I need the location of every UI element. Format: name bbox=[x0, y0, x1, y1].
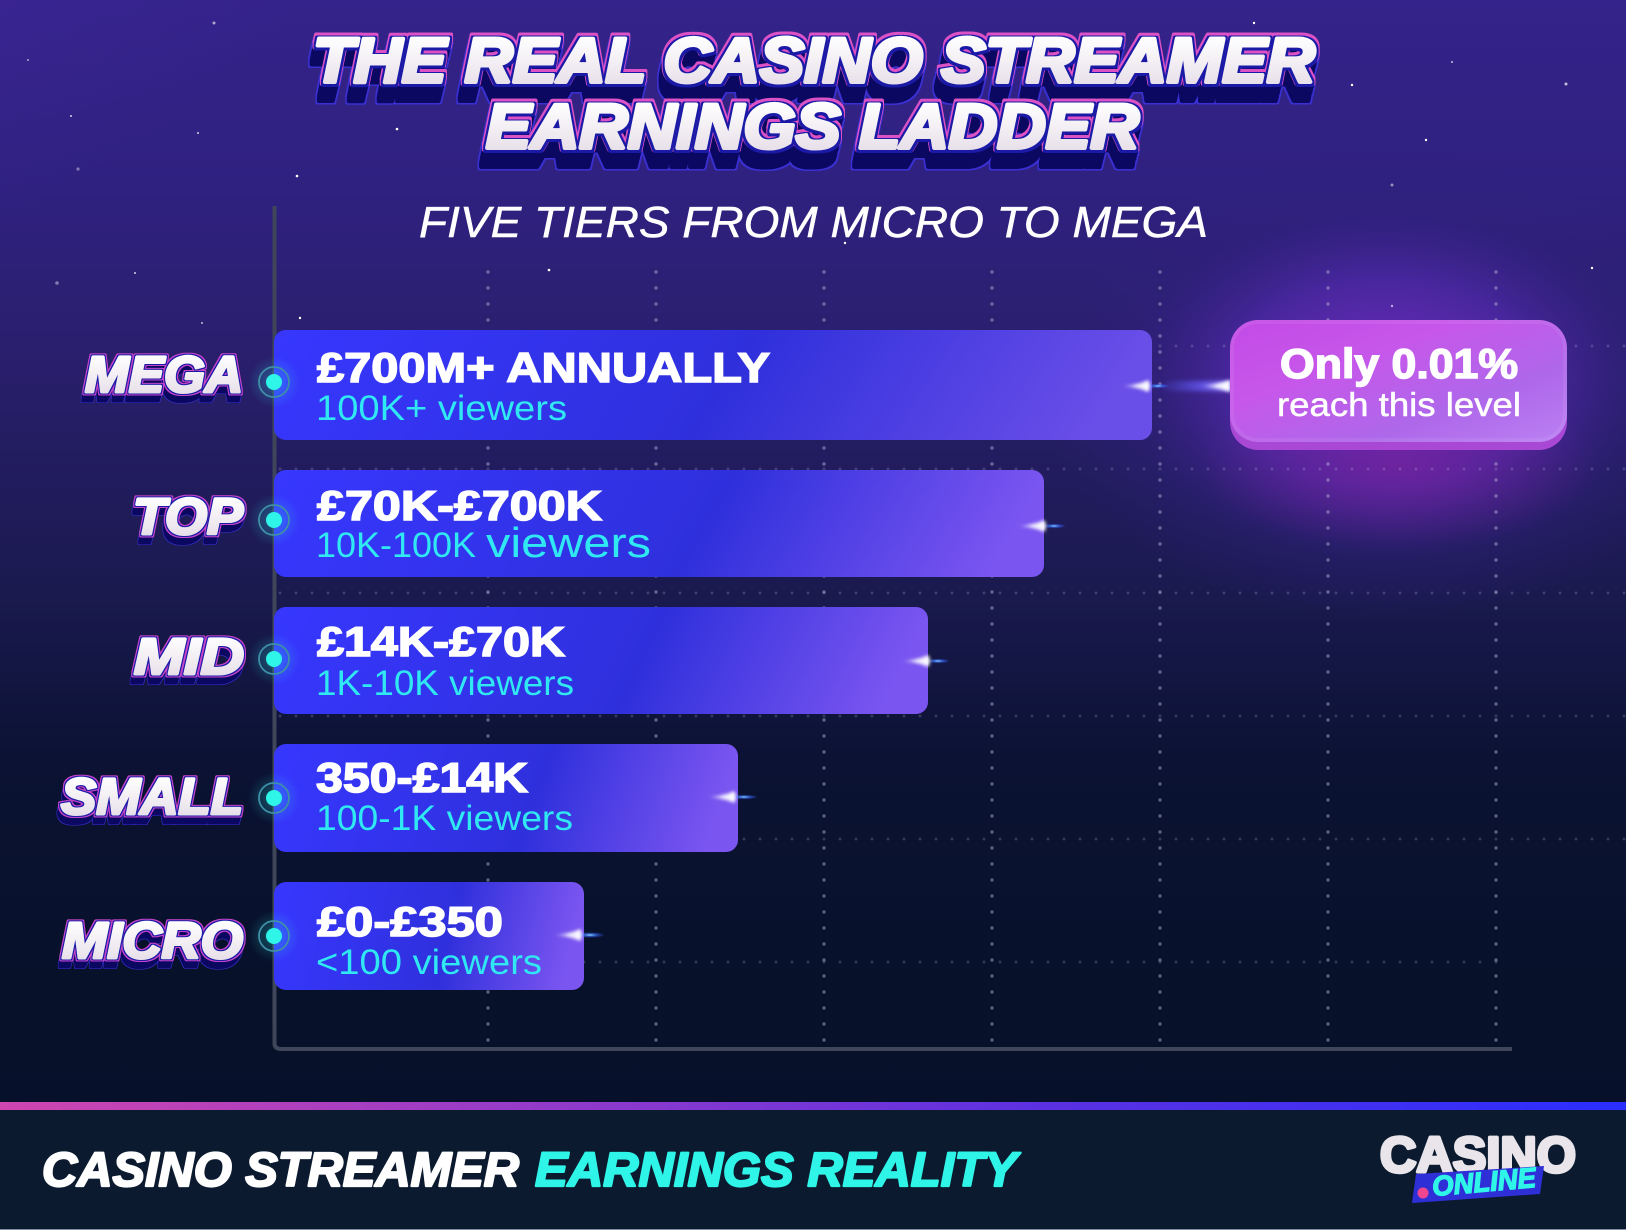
marker dot bbox=[248, 772, 300, 824]
flare bbox=[900, 655, 950, 667]
tier: top bbox=[133, 470, 1066, 577]
logo: casino.online: ONLINE bbox=[1431, 1162, 1538, 1202]
stars bbox=[27, 22, 1593, 324]
bar bbox=[274, 607, 928, 714]
viewers: viewers bbox=[486, 519, 651, 566]
flare bbox=[706, 791, 758, 803]
earnings: £700M+ ANNUALLY bbox=[317, 344, 770, 391]
footer text: CASINO STREAMER bbox=[42, 1144, 519, 1197]
footer rule bbox=[0, 1102, 1626, 1110]
tier: mid bbox=[134, 607, 950, 714]
tier: micro bbox=[62, 882, 605, 990]
viewers: 100K+ viewers bbox=[316, 389, 567, 428]
tier label: MID bbox=[134, 628, 244, 685]
tier label: TOP bbox=[133, 488, 244, 545]
tier: mega bbox=[85, 330, 1170, 440]
subtitle: FIVE TIERS FROM MICRO TO MEGA bbox=[419, 198, 1208, 247]
chart axes bbox=[274, 206, 1512, 1049]
tier: small bbox=[61, 744, 758, 852]
flare bbox=[1016, 520, 1066, 532]
earnings: £0-£350 bbox=[317, 898, 503, 945]
bar bbox=[274, 470, 1044, 577]
flare bbox=[1120, 380, 1170, 392]
viewers: 1K-10K viewers bbox=[316, 664, 574, 703]
viewers: <100 viewers bbox=[316, 943, 542, 982]
marker dot bbox=[248, 633, 300, 685]
viewers: 100-1K viewers bbox=[316, 799, 573, 838]
chart grid bbox=[280, 272, 1626, 1050]
earnings: 350-£14K bbox=[316, 754, 528, 801]
bar bbox=[274, 882, 584, 990]
footer text bbox=[42, 1144, 1021, 1197]
title bbox=[313, 26, 1316, 162]
tier label: SMALL bbox=[61, 768, 243, 825]
callout: only 0.01% bbox=[1230, 320, 1567, 450]
marker dot bbox=[248, 910, 300, 962]
viewers: 10K-100K bbox=[316, 526, 476, 565]
footer text: EARNINGS REALITY bbox=[535, 1144, 1021, 1197]
callout headline: Only 0.01% bbox=[1280, 340, 1518, 387]
bar bbox=[274, 330, 1152, 440]
flare bbox=[552, 929, 605, 941]
callout subline: reach this level bbox=[1277, 386, 1521, 423]
tier label: MICRO bbox=[62, 912, 243, 969]
tier label: MEGA bbox=[85, 346, 243, 403]
earnings: £14K-£70K bbox=[317, 618, 565, 665]
connector arrow: mega to callout bbox=[1165, 380, 1231, 392]
title: EARNINGS LADDER bbox=[486, 92, 1140, 162]
title: THE REAL CASINO STREAMER bbox=[313, 26, 1316, 96]
marker dot bbox=[248, 494, 300, 546]
footer band bbox=[0, 1102, 1626, 1230]
marker dot bbox=[248, 356, 300, 408]
logo: casino.online: CASINO bbox=[1380, 1127, 1576, 1183]
bar bbox=[274, 744, 738, 852]
earnings: £70K-£700K bbox=[317, 482, 602, 529]
